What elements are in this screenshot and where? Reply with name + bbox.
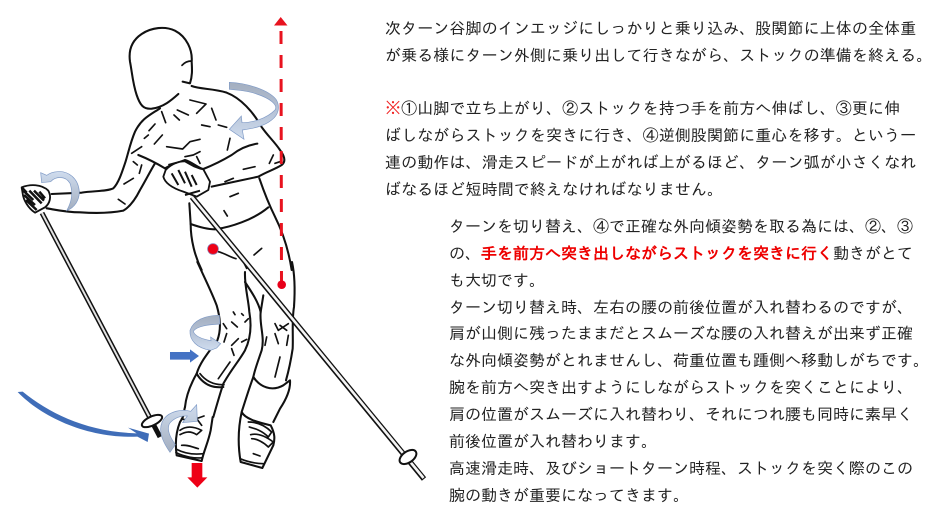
text block: note: ばしながらストックを突きに行き、④逆側股関節に重心を移す。という一 xyxy=(385,126,916,145)
text block: note: ※①山脚で立ち上がり、②ストックを持つ手を前方へ伸ばし、③更に伸 xyxy=(385,99,900,118)
text block: explanation: ターンを切り替え、④で正確な外向傾姿勢を取る為には、②、③ xyxy=(449,218,913,236)
arrow: red downward xyxy=(187,463,207,488)
skier illustration xyxy=(18,17,424,488)
arrow: hand rotation xyxy=(41,172,79,211)
text block: explanation: 肩の位置がスムーズに入れ替わり、それにつれ腰も同時に素早く xyxy=(449,406,913,424)
front thigh and shin xyxy=(185,262,220,407)
arrow: knee rotation xyxy=(190,315,221,350)
back and right arm xyxy=(192,86,284,187)
inner edge of front leg xyxy=(213,272,251,417)
hands on grips xyxy=(22,161,210,213)
text block: explanation: 腕を前方へ突き出すようにしながらストックを突くことにより、 xyxy=(449,379,913,397)
text block: explanation: 高速滑走時、及びショートターン時程、ストックを突く際のこの xyxy=(449,460,913,478)
red dot: hip joint xyxy=(208,244,218,254)
right hand xyxy=(163,161,210,197)
text block: note: 連の動作は、滑走スピードが上がれば上がるほど、ターン弧が小さくなれ xyxy=(385,153,916,172)
text block: intro xyxy=(385,20,930,65)
upper body line drawing xyxy=(47,28,292,270)
rear boot xyxy=(239,377,290,468)
text block: explanation: の、手を前方へ突き出しながらストックを突きに行く動きがとて xyxy=(449,245,913,263)
knee marks xyxy=(223,312,288,355)
left ski pole xyxy=(42,213,164,437)
arrow: foot rotation xyxy=(161,405,197,452)
arrow: blue push toward knee xyxy=(170,349,199,363)
left hand xyxy=(22,185,50,213)
torso right edge xyxy=(259,178,292,270)
text block: explanation: な外向傾姿勢がとれませんし、荷重位置も踵側へ移動しがちです。 xyxy=(449,352,929,370)
text block: intro: が乗る様にターン外側に乗り出して行きながら、ストックの準備を終える。 xyxy=(385,47,930,65)
right pole basket xyxy=(397,447,419,467)
text block: note xyxy=(385,99,916,199)
text block: note: ばなるほど短時間で終えなければなりません。 xyxy=(385,180,723,199)
shin marks xyxy=(218,357,280,379)
text block: explanation xyxy=(449,218,929,505)
red dot: weight line foot xyxy=(277,280,286,289)
front boot xyxy=(176,374,223,461)
torso left and hip xyxy=(189,203,202,270)
ear hook xyxy=(182,61,192,65)
right ski pole xyxy=(192,197,424,479)
vertical red dashed line with arrow xyxy=(274,17,288,289)
chest line xyxy=(138,155,165,168)
text block: explanation: 腕の動きが重要になってきます。 xyxy=(449,487,689,505)
text block: explanation: 前後位置が入れ替わります。 xyxy=(449,433,657,451)
text block: explanation: も大切です。 xyxy=(449,273,545,290)
forearm top xyxy=(165,144,257,169)
shoulder and left arm top xyxy=(52,108,160,194)
arrow: blue curved pole plant xyxy=(18,392,149,442)
text block: explanation: 肩が山側に残ったままだとスムーズな腰の入れ替えが出来ず正確 xyxy=(449,325,913,343)
rear leg xyxy=(245,282,263,377)
arrow: shoulder rotation xyxy=(229,82,278,139)
left pole basket xyxy=(140,412,164,430)
left arm bottom xyxy=(47,163,155,213)
legs and boots line drawing xyxy=(176,262,295,468)
muscle marks xyxy=(118,100,280,216)
groin crease xyxy=(218,248,262,268)
text block: explanation: ターン切り替え時、左右の腰の前後位置が入れ替わるのですが、 xyxy=(449,299,913,317)
head xyxy=(130,28,192,109)
text block: intro: 次ターン谷脚のインエッジにしっかりと乗り込み、股関節に上体の全体重 xyxy=(385,20,916,38)
waistband xyxy=(191,207,268,229)
